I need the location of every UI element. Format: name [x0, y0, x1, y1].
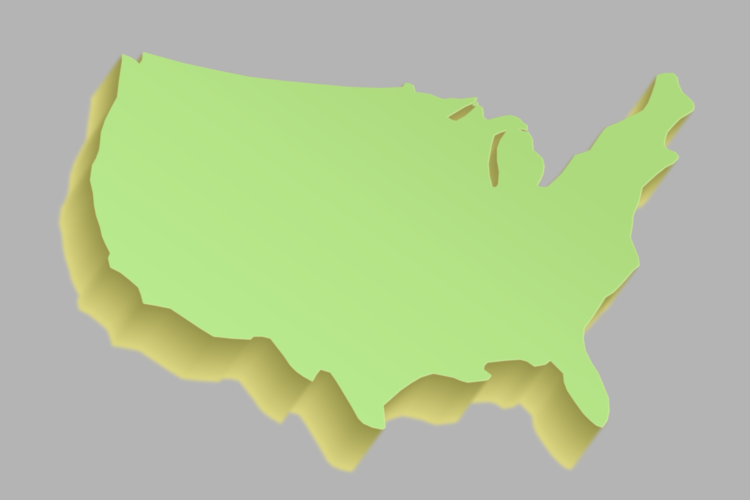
top face of the United States map: [90, 52, 694, 429]
extruded side shadow of the map: [59, 54, 693, 472]
edge highlight of the map: [91, 53, 695, 430]
